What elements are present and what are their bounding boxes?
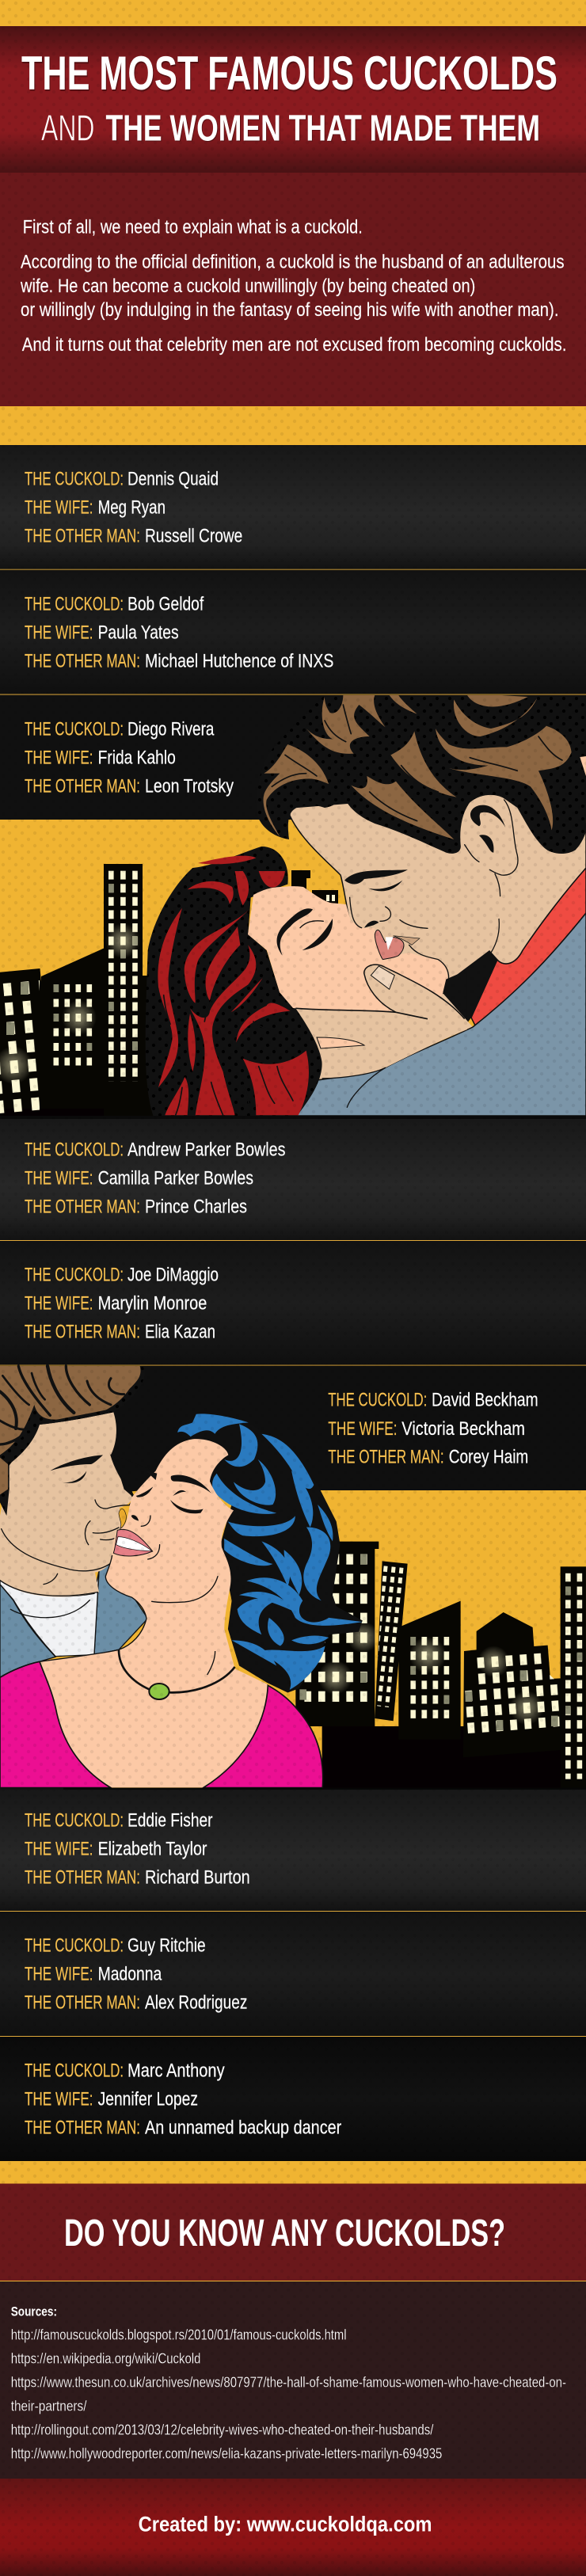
- beckham credits: Corey Haim: [449, 1446, 528, 1468]
- title word: and: AND: [41, 108, 95, 149]
- source links: their-partners/: [11, 2398, 87, 2414]
- woman: face: [248, 886, 447, 1019]
- man: hair: [257, 695, 586, 896]
- panel: Andrew Parker Bowles: THE OTHER MAN:: [25, 1196, 140, 1217]
- beckham credits: THE WIFE:: [328, 1418, 398, 1440]
- panel: Bob Geldof: THE OTHER MAN:: [25, 651, 140, 672]
- panel: Dennis Quaid: [0, 445, 586, 570]
- panel: Eddie Fisher: THE WIFE:: [25, 1838, 93, 1859]
- panel: Guy Ritchie: THE WIFE:: [25, 1963, 93, 1984]
- panel: Joe DiMaggio: THE WIFE:: [25, 1292, 93, 1314]
- man: collar, neck shadow and jacket: [293, 868, 586, 1116]
- panel: Eddie Fisher: Elizabeth Taylor: [98, 1838, 207, 1859]
- panel: Marc Anthony: [0, 2037, 586, 2161]
- panel: Andrew Parker Bowles: Andrew Parker Bowles: [127, 1139, 285, 1160]
- panel: Diego Rivera with kiss illustration: [0, 695, 586, 1119]
- footer credit: Created by: www.cuckoldqa.com: [139, 2513, 432, 2536]
- title banner: [0, 26, 586, 173]
- woman: pink top: [0, 1649, 323, 1788]
- panel: Guy Ritchie: THE OTHER MAN:: [25, 1992, 140, 2013]
- panel: Andrew Parker Bowles: Prince Charles: [145, 1196, 247, 1217]
- panel: Joe DiMaggio: THE OTHER MAN:: [25, 1321, 140, 1342]
- panel: Marc Anthony: THE CUCKOLD:: [25, 2060, 124, 2081]
- panel: Bob Geldof: Michael Hutchence of INXS: [145, 651, 333, 672]
- panel: Joe DiMaggio: [0, 1241, 586, 1366]
- panel: Eddie Fisher: THE CUCKOLD:: [25, 1809, 124, 1831]
- panel: Bob Geldof: Paula Yates: [98, 622, 179, 644]
- panel: Guy Ritchie: THE CUCKOLD:: [25, 1935, 124, 1956]
- panel: closing question: [0, 2184, 586, 2281]
- yellow divider band: [0, 406, 586, 445]
- top yellow band: [0, 0, 586, 26]
- necklace: [119, 1649, 235, 1699]
- source links: [11, 2327, 566, 2462]
- panel: Joe DiMaggio: THE CUCKOLD:: [25, 1264, 124, 1285]
- sources heading: Sources:: [11, 2304, 57, 2319]
- city skyline left: [0, 864, 338, 1116]
- panel: introduction: [0, 173, 586, 406]
- man: ear: [465, 800, 518, 896]
- rivera credits: THE OTHER MAN:: [25, 775, 140, 797]
- panel: Andrew Parker Bowles: Camilla Parker Bowles: [98, 1167, 253, 1189]
- source links: http://rollingout.com/2013/03/12/celebrity-wives-who-cheated-on-their-husbands/: [11, 2422, 434, 2438]
- panel: Dennis Quaid: Meg Ryan: [98, 497, 166, 519]
- man: face: [0, 1412, 133, 1618]
- rivera credits: THE CUCKOLD:: [25, 719, 124, 740]
- panel: Dennis Quaid: Dennis Quaid: [127, 469, 219, 490]
- rivera credits: Leon Trotsky: [145, 775, 234, 797]
- footer credit: [0, 2479, 586, 2576]
- panel: Bob Geldof: THE CUCKOLD:: [25, 594, 124, 615]
- source links: http://famouscuckolds.blogspot.rs/2010/01/famous-cuckolds.html: [11, 2327, 347, 2343]
- panel: Dennis Quaid: THE WIFE:: [25, 497, 93, 519]
- panel: Marc Anthony: THE OTHER MAN:: [25, 2117, 140, 2138]
- panel: Dennis Quaid: Russell Crowe: [145, 526, 242, 547]
- man: jaw line: [491, 919, 499, 953]
- beckham credits: THE OTHER MAN:: [328, 1446, 444, 1468]
- panel: Dennis Quaid: THE OTHER MAN:: [25, 526, 140, 547]
- panel: Marc Anthony: Jennifer Lopez: [98, 2088, 198, 2110]
- city skyline right: [295, 1542, 586, 1789]
- panel: Dennis Quaid: THE CUCKOLD:: [25, 469, 124, 490]
- panel: Joe DiMaggio: Joe DiMaggio: [127, 1264, 219, 1285]
- source links: https://en.wikipedia.org/wiki/Cuckold: [11, 2350, 200, 2367]
- yellow sky: [0, 1490, 586, 1788]
- woman: brow, eye and nose: [131, 1471, 218, 1603]
- panel: Andrew Parker Bowles: THE WIFE:: [25, 1167, 93, 1189]
- panel: Marc Anthony: An unnamed backup dancer: [145, 2117, 341, 2138]
- panel: Eddie Fisher: Richard Burton: [145, 1866, 250, 1888]
- panel: sources: [0, 2281, 586, 2479]
- panel: Bob Geldof: [0, 570, 586, 695]
- man: hair: [0, 1366, 145, 1516]
- panel: Bob Geldof: Bob Geldof: [127, 594, 204, 615]
- panel: Joe DiMaggio: Marylin Monroe: [98, 1292, 207, 1314]
- panel: David Beckham with kiss illustration: [0, 1366, 586, 1790]
- panel: Bob Geldof: THE WIFE:: [25, 622, 93, 644]
- man: eyebrow and eye: [344, 869, 408, 891]
- beckham credits: THE CUCKOLD:: [328, 1390, 427, 1411]
- source links: http://www.hollywoodreporter.com/news/elia-kazans-private-letters-marilyn-694935: [11, 2445, 442, 2462]
- panel: Marc Anthony: Marc Anthony: [127, 2060, 225, 2081]
- beckham credits: [328, 1390, 538, 1468]
- rivera credits: THE WIFE:: [25, 748, 93, 769]
- panel: Andrew Parker Bowles: THE CUCKOLD:: [25, 1139, 124, 1160]
- panel: Guy Ritchie: Alex Rodriguez: [145, 1992, 247, 2013]
- intro sentence: First of all, we need to explain what is a cuckold.: [23, 217, 363, 238]
- yellow divider band: [0, 2161, 586, 2184]
- panel: Joe DiMaggio: Elia Kazan: [145, 1321, 215, 1342]
- yellow sky: [0, 820, 586, 1116]
- panel: Eddie Fisher: THE OTHER MAN:: [25, 1866, 140, 1888]
- woman: facial details and man's hand: [277, 897, 467, 1107]
- panel: Eddie Fisher: Eddie Fisher: [127, 1809, 213, 1831]
- woman: red hair: [146, 847, 322, 1116]
- woman: face, neck and top: [40, 1439, 268, 1787]
- rivera credits: [25, 719, 234, 797]
- beckham credits: Victoria Beckham: [401, 1418, 525, 1440]
- definition text: wife. He can become a cuckold unwillingly (by being cheated on): [20, 276, 475, 297]
- definition text: [20, 252, 565, 321]
- man: shirt and jacket: [0, 1563, 148, 1677]
- man: face: [290, 792, 586, 982]
- woman: lips: [113, 1529, 153, 1556]
- woman: blue hair: [177, 1413, 363, 1692]
- panel: Marc Anthony: THE WIFE:: [25, 2088, 93, 2110]
- panel: Andrew Parker Bowles: [0, 1116, 586, 1241]
- rivera credits: Frida Kahlo: [98, 748, 176, 769]
- panel: Guy Ritchie: [0, 1912, 586, 2037]
- beckham credits: David Beckham: [432, 1390, 538, 1411]
- panel: Guy Ritchie: Guy Ritchie: [127, 1935, 206, 1956]
- panel: Guy Ritchie: Madonna: [98, 1963, 162, 1984]
- rivera credits: Diego Rivera: [127, 719, 215, 740]
- panel: Eddie Fisher: [0, 1790, 586, 1912]
